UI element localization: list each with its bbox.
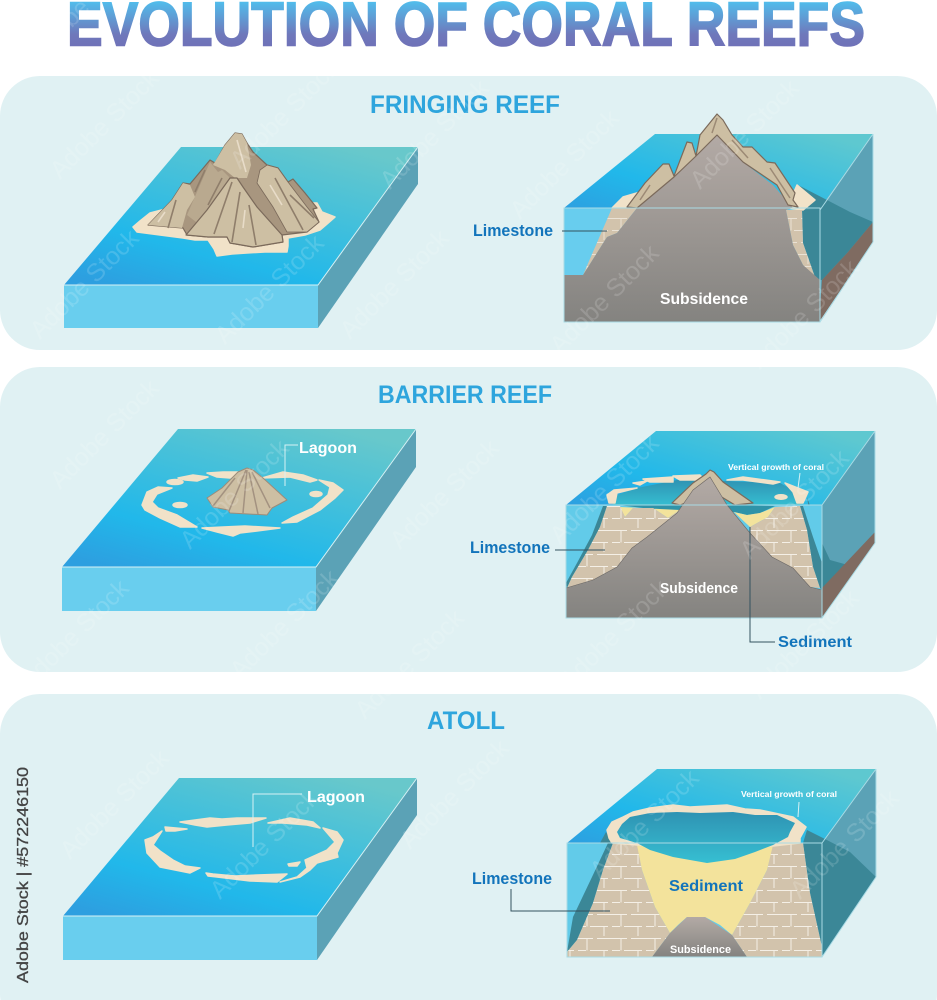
- block: atoll cross-section: [472, 769, 876, 957]
- mountain section: [564, 135, 820, 322]
- block: atoll surface: [63, 778, 417, 960]
- watermark: Adobe Stock: [334, 224, 455, 344]
- panel: barrier reef: [0, 367, 937, 672]
- label: limestone: Limestone: [470, 539, 550, 557]
- watermark: Adobe Stock: [394, 734, 515, 854]
- sediment: [637, 845, 773, 935]
- island sand: [133, 200, 335, 256]
- watermark: Adobe Stock: [544, 429, 665, 549]
- block: fringing reef surface: [64, 133, 418, 328]
- subsidence mound: [652, 917, 747, 957]
- watermark: Adobe Stock: [224, 564, 345, 684]
- label: subsidence: Subsidence: [660, 291, 748, 308]
- watermark: Adobe Stock: [744, 254, 865, 374]
- panel: atoll: [0, 694, 937, 1000]
- label: sediment: Sediment: [669, 878, 744, 895]
- mountain section: [566, 477, 822, 618]
- sediment: [620, 507, 775, 527]
- label: subsidence: Subsidence: [660, 581, 738, 597]
- stock id caption: Adobe Stock | #572246150: [15, 767, 32, 983]
- label: lagoon: Lagoon: [299, 440, 357, 457]
- watermark: Adobe Stock: [24, 224, 145, 344]
- block: fringing reef cross-section: [473, 114, 873, 322]
- volcano crust: [672, 470, 753, 505]
- watermark: Adobe Stock: [209, 229, 330, 349]
- label: lagoon: Lagoon: [307, 789, 365, 806]
- label: limestone: Limestone: [472, 870, 552, 888]
- limestone: [567, 506, 820, 588]
- watermark: Adobe Stock: [384, 434, 505, 554]
- watermark: Adobe Stock: [349, 604, 470, 724]
- heading: atoll: ATOLL: [427, 707, 505, 735]
- watermark: Adobe Stock: [224, 54, 345, 174]
- watermark: Adobe Stock: [44, 64, 165, 184]
- watermark: Adobe Stock: [374, 74, 495, 194]
- label: vertical growth: Vertical growth of coral: [741, 789, 837, 799]
- watermark: Adobe Stock: [174, 434, 295, 554]
- limestone: [567, 843, 822, 957]
- panel: fringing reef: [0, 76, 937, 350]
- block: barrier reef surface: [62, 429, 416, 611]
- watermark: Adobe Stock: [504, 104, 625, 224]
- mountain crust: [627, 114, 798, 208]
- reef ring: [145, 818, 343, 882]
- watermark: Adobe Stock: [554, 574, 675, 694]
- label: subsidence: Subsidence: [670, 944, 731, 956]
- watermark: Adobe Stock: [584, 764, 705, 884]
- limestone: [583, 208, 816, 280]
- watermark: Adobe Stock: [54, 744, 175, 864]
- label: limestone: Limestone: [473, 222, 553, 240]
- reef ring and lagoon: [607, 805, 806, 863]
- watermark: Adobe Stock: [14, 574, 135, 694]
- watermark: Adobe Stock: [744, 584, 865, 704]
- heading: barrier reef: BARRIER REEF: [378, 381, 552, 409]
- reef ring: [142, 472, 343, 536]
- watermark: Adobe Stock: [734, 444, 855, 564]
- watermark: Adobe Stock: [784, 784, 905, 904]
- volcano remnant: [207, 468, 287, 515]
- sand: [612, 192, 640, 208]
- mountain: [148, 133, 319, 247]
- heading: fringing reef: FRINGING REEF: [370, 91, 560, 119]
- watermark: Adobe Stock: [44, 374, 165, 494]
- label: sediment: Sediment: [778, 634, 853, 651]
- lagoon and reef ring: [607, 475, 808, 506]
- watermark: Adobe Stock: [204, 784, 325, 904]
- watermark: Adobe Stock: [544, 239, 665, 359]
- block: barrier reef cross-section: [470, 431, 875, 651]
- watermark: Adobe Stock: [684, 74, 805, 194]
- label: vertical growth: Vertical growth of coral: [728, 462, 824, 472]
